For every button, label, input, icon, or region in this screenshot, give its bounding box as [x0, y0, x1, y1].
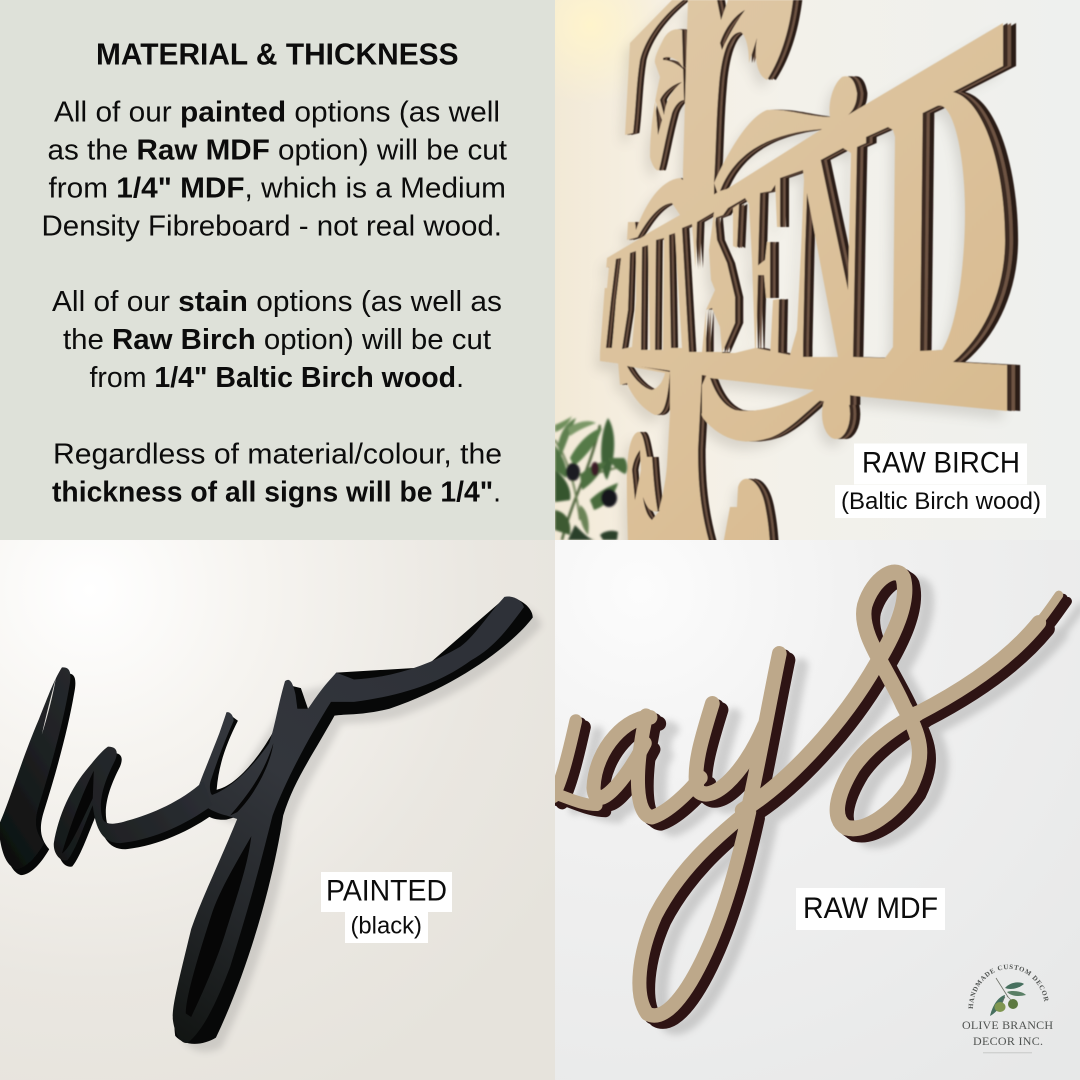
logo: Olive Branch Decor: OLIVE BRANCH: [962, 1018, 1053, 1032]
sign shadow: [182, 605, 542, 1052]
panel: material and thickness text: [0, 0, 555, 540]
black script sign: [0, 596, 542, 1052]
text block: painted and MDF: as the Raw MDF option) will be cut: [48, 134, 507, 166]
panel: raw MDF photo: [555, 540, 1080, 1080]
panel: painted black photo: [0, 540, 555, 1080]
sign face: [553, 572, 1059, 1015]
logo: Olive Branch Decor: [962, 964, 1053, 1054]
text block: thickness statement: [52, 438, 502, 508]
label: raw MDF: RAW MDF: [803, 892, 938, 925]
label: painted: (black): [350, 913, 422, 940]
sign depth: [562, 579, 1068, 1022]
label: painted: PAINTED: [326, 874, 447, 908]
a and y openings: [62, 771, 94, 853]
text block: thickness statement: Regardless of material/colour, the: [53, 438, 502, 470]
text block: stain and birch: [52, 286, 502, 394]
logo: Olive Branch Decor: DECOR INC.: [973, 1034, 1043, 1048]
text block: stain and birch: All of our stain options (as well as: [52, 286, 502, 318]
text block: stain and birch: the Raw Birch option) will be cut: [63, 324, 491, 356]
text block: stain and birch: from 1/4" Baltic Birch wood.: [90, 362, 464, 394]
label: raw birch: RAW BIRCH: [862, 446, 1020, 480]
label: raw birch: [835, 444, 1046, 518]
birch sign: [600, 0, 1021, 540]
wall shadow of sign: [594, 6, 1006, 540]
text block: thickness statement: thickness of all signs will be 1/4".: [52, 476, 501, 508]
sign shadow: [575, 585, 1080, 1028]
label: painted: [321, 872, 452, 943]
icon: olive branch: [990, 978, 1026, 1016]
text block: painted and MDF: from 1/4" MDF, which is a Medium: [48, 172, 506, 204]
logo: Olive Branch Decor: HANDMADE CUSTOM DECOR: [968, 964, 1048, 1009]
text block: painted and MDF: [42, 97, 507, 243]
sign depth: [174, 597, 533, 1044]
plant: [555, 416, 627, 540]
MDF script sign: [553, 572, 1080, 1028]
title: MATERIAL & THICKNESS: [96, 36, 458, 72]
panel: raw birch photo: [536, 0, 1080, 568]
label: raw birch: (Baltic Birch wood): [841, 488, 1041, 515]
text block: painted and MDF: All of our painted options (as well: [54, 97, 500, 129]
sign face: [173, 596, 524, 1043]
text block: painted and MDF: Density Fibreboard - not real wood.: [42, 211, 502, 243]
